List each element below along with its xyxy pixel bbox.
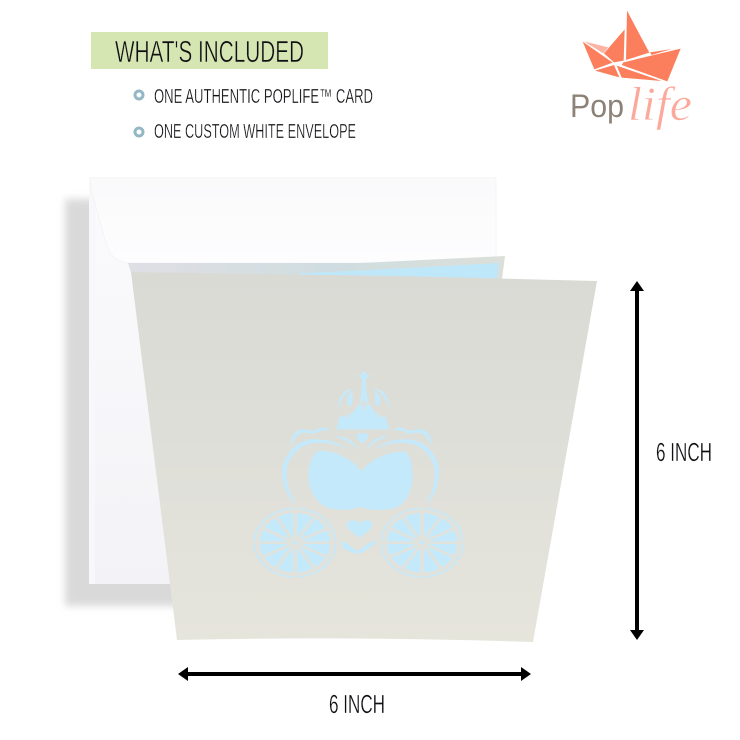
icon: origami boat [583,11,681,81]
arrow: height dimension [630,281,644,640]
envelope body edge [89,177,95,584]
chevron [342,540,375,554]
carriage cutout: wheels [251,506,466,580]
card front [131,272,597,642]
right wheel [378,506,466,580]
logo: poplife: life [628,78,692,131]
label: height: 6 INCH [656,437,712,467]
envelope [65,177,496,606]
carriage body [308,451,413,510]
item: envelope [135,121,356,143]
carriage arches [282,439,439,503]
logo: poplife: Pop [570,88,624,124]
heading: what's included: WHAT'S INCLUDED [115,34,304,69]
label: width: 6 INCH [329,689,385,719]
envelope flap [91,178,496,263]
list of included items [135,86,373,143]
crown [336,372,390,429]
envelope shadow [65,199,195,606]
item: envelope: ONE CUSTOM WHITE ENVELOPE [154,121,356,143]
logo: poplife [570,11,692,131]
card back page [128,256,505,279]
carriage cutout: upper [282,372,439,510]
item: poplife card: ONE AUTHENTIC POPLIFE™ CARD [154,86,373,108]
crown cross details [343,400,384,418]
center heart [347,520,372,538]
scrolls [291,428,431,450]
arrow: width dimension [178,667,531,681]
item: poplife card [135,86,373,108]
left wheel [251,506,339,580]
small heart [357,433,368,443]
heading: what's included [91,32,328,69]
